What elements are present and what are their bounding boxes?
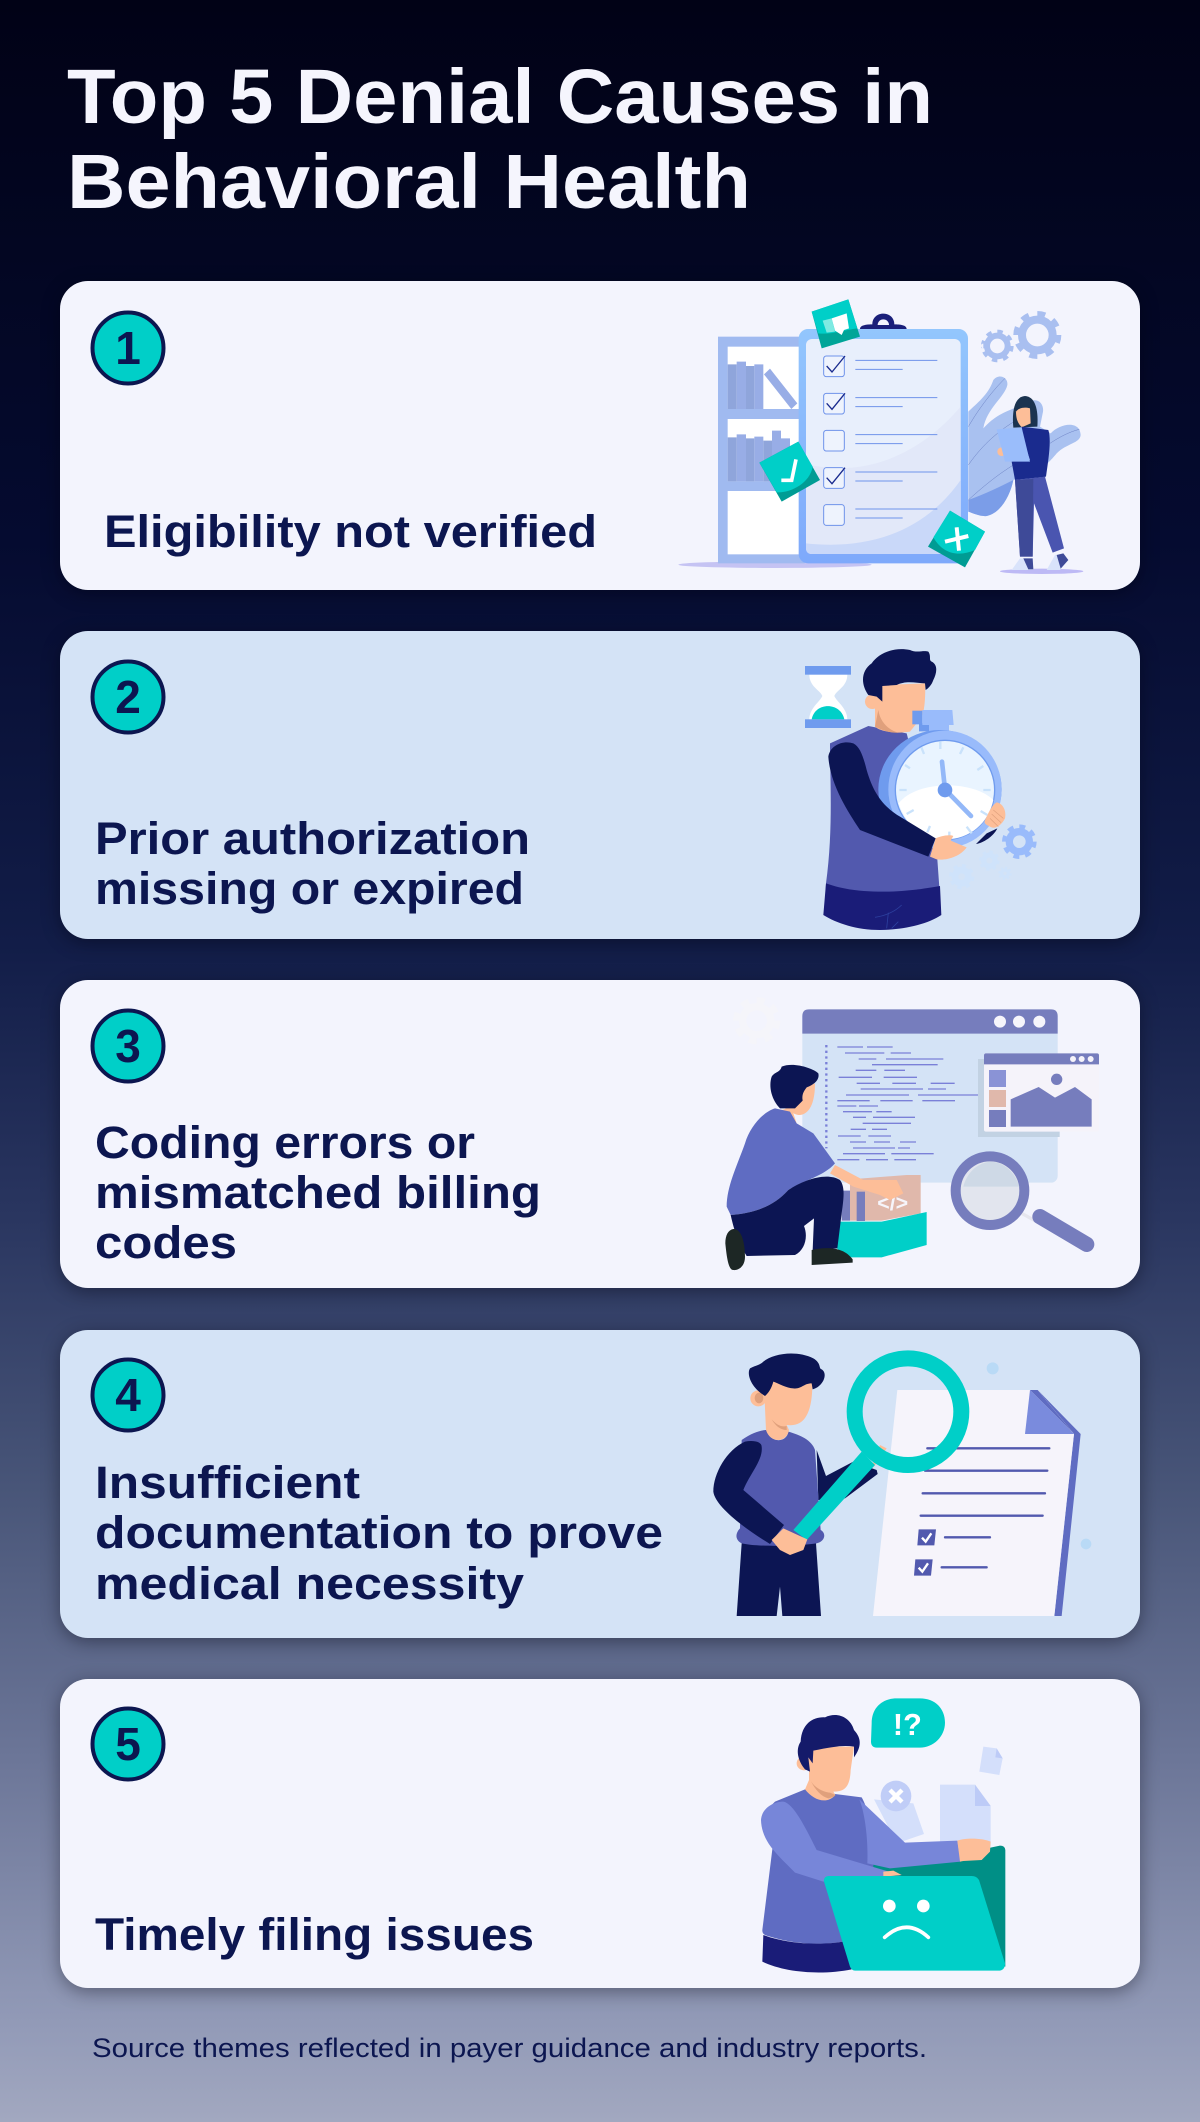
illustration: checklist and woman	[678, 299, 1083, 574]
illustration: man with sad folder	[761, 1698, 1005, 1972]
speech bubble: !?	[893, 1708, 922, 1742]
man body	[823, 649, 941, 930]
folder back	[872, 1846, 1005, 1967]
blue gear	[1004, 827, 1034, 857]
title: Behavioral Health	[67, 139, 751, 225]
document	[873, 1390, 1081, 1616]
man arm	[828, 742, 967, 860]
card background 1	[60, 281, 1140, 590]
folder front with sad face	[824, 1876, 1005, 1971]
card background 2	[60, 631, 1140, 939]
image window	[978, 1053, 1099, 1137]
number badge 5: 5	[115, 1718, 141, 1770]
illustration: man holding stopwatch	[805, 649, 1034, 930]
number badge 5	[92, 1708, 164, 1780]
faint gear	[737, 1001, 777, 1041]
man kneeling	[725, 1065, 903, 1270]
box with code	[835, 1175, 927, 1257]
floating papers	[874, 1747, 1003, 1847]
title: Top 5 Denial Causes in	[67, 54, 933, 140]
illustration: man inspecting document	[713, 1354, 1091, 1616]
card background 4	[60, 1330, 1140, 1638]
panel: cause 5	[60, 1679, 1140, 1988]
title	[67, 54, 933, 225]
heading 4: documentation to prove	[95, 1507, 663, 1558]
decorative dots	[987, 1362, 1091, 1549]
card background 3	[60, 980, 1140, 1288]
leaves	[968, 376, 1081, 516]
card background 5	[60, 1679, 1140, 1988]
pale gears	[951, 852, 1011, 888]
heading 1: Eligibility not verified	[104, 506, 597, 557]
source note: Source themes reflected in payer guidance and industry reports.	[92, 2033, 927, 2063]
number badge 2: 2	[115, 671, 141, 723]
code window	[802, 1009, 1058, 1183]
number badge 4: 4	[115, 1369, 141, 1421]
number badge 1: 1	[115, 322, 141, 374]
illustration: man reviewing code	[725, 1001, 1099, 1270]
number badge 1	[92, 312, 164, 384]
clipboard	[799, 314, 968, 563]
heading 4: medical necessity	[95, 1558, 524, 1609]
tile: thumbs down	[812, 299, 860, 348]
teal magnifier	[793, 1358, 961, 1540]
heading 2: Prior authorization	[95, 813, 530, 864]
heading 3: Coding errors or	[95, 1117, 475, 1168]
number badge 4	[92, 1360, 164, 1430]
heading 4	[95, 1457, 663, 1609]
woman	[997, 396, 1083, 574]
panel: cause 4	[60, 1330, 1140, 1638]
number badge 2	[92, 662, 164, 732]
heading 4: Insufficient	[95, 1457, 360, 1508]
bookshelf	[718, 337, 805, 563]
hourglass	[805, 666, 851, 728]
panel: cause 2	[60, 631, 1140, 939]
tile: cross	[928, 511, 985, 567]
floor shadow	[678, 561, 872, 568]
number badge 3	[92, 1010, 164, 1082]
man	[761, 1715, 991, 1972]
magnifying glass	[956, 1156, 1087, 1244]
hand on magnifier	[772, 1528, 807, 1555]
box with code: </>	[877, 1191, 908, 1215]
number badge 3: 3	[115, 1020, 141, 1072]
heading 3	[95, 1117, 541, 1268]
heading 2	[95, 813, 530, 914]
panel: cause 3	[60, 980, 1140, 1288]
man	[713, 1354, 887, 1616]
heading 2: missing or expired	[95, 863, 524, 914]
heading 5: Timely filing issues	[95, 1909, 534, 1960]
tile: check	[759, 442, 820, 502]
gears	[983, 314, 1058, 360]
panel: cause 1	[60, 281, 1140, 590]
heading 3: mismatched billing	[95, 1167, 541, 1218]
heading 3: codes	[95, 1217, 237, 1268]
speech bubble	[871, 1698, 945, 1748]
stopwatch	[878, 710, 1005, 849]
